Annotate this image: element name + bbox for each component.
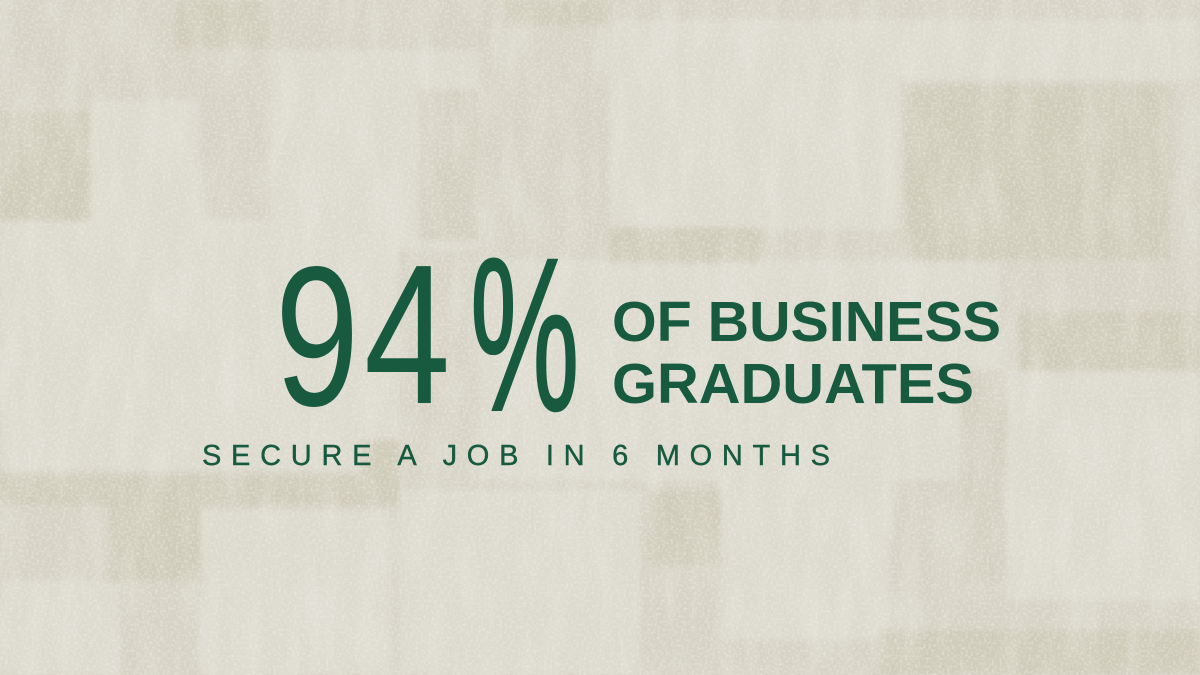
- big statistic: 94%: [275, 213, 579, 457]
- heading: of business graduates: [612, 290, 1001, 416]
- digits 94: 9: [275, 226, 359, 448]
- heading: of business graduates: OF BUSINESS: [612, 290, 1001, 354]
- digits 94: 4: [364, 222, 450, 445]
- subheading: secure a job in 6 months: SECURE A JOB IN 6 MONTHS: [202, 440, 830, 472]
- digits 94: [275, 222, 450, 448]
- heading: of business graduates: GRADUATES: [612, 352, 974, 416]
- percent sign: %: [470, 213, 579, 457]
